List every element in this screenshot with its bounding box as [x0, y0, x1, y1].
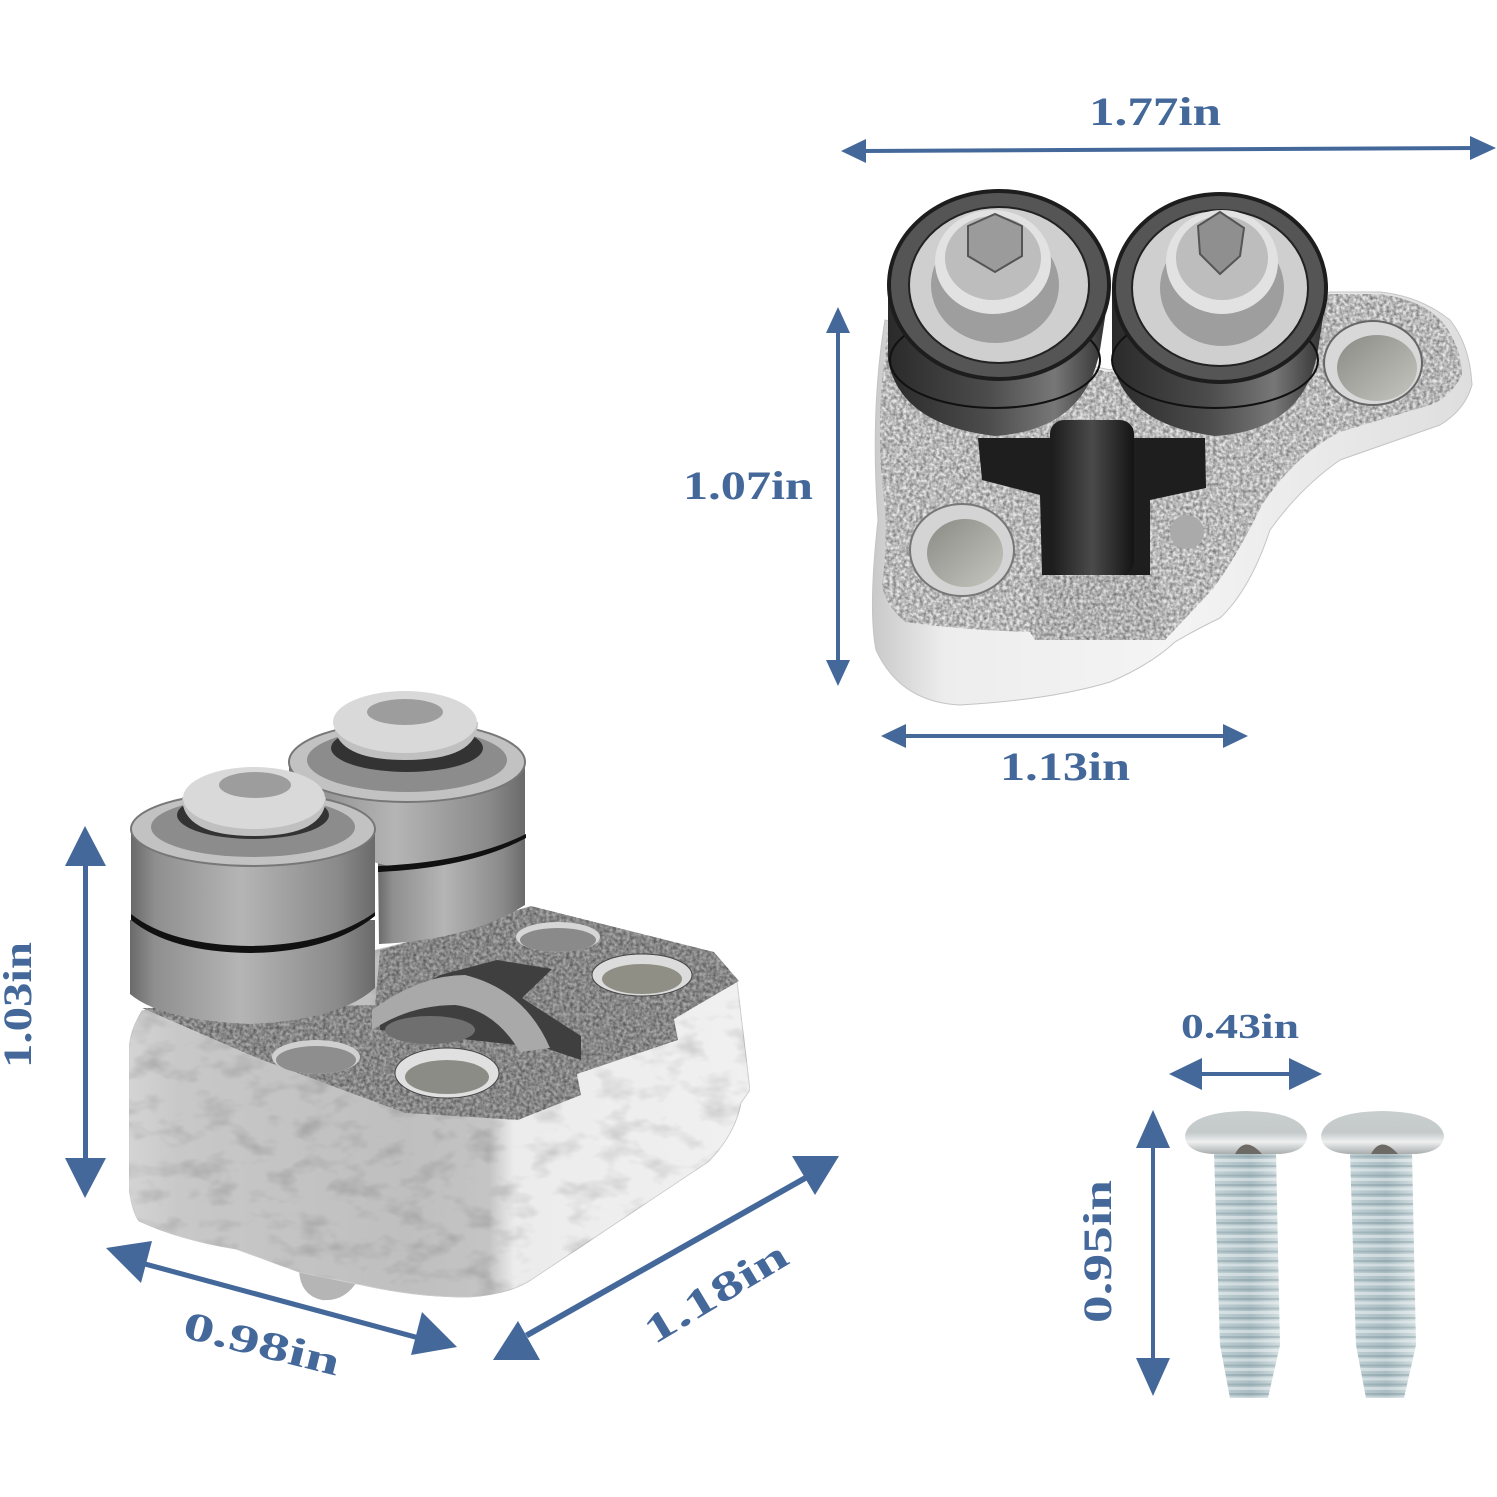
base top surface — [142, 906, 739, 1120]
back roller — [289, 691, 526, 944]
small locating dimple — [1170, 515, 1204, 549]
arrow: 1.77in — [841, 136, 1496, 163]
arrow: 1.13in — [881, 724, 1248, 748]
arrow: 1.03in — [65, 826, 106, 1198]
wheel pit — [380, 960, 581, 1060]
product: top view bracket — [872, 189, 1472, 705]
centre wheel — [1050, 420, 1134, 575]
label: 0.95in: 0.95in — [1075, 1180, 1120, 1323]
product: right screw — [1321, 1111, 1444, 1398]
label: 0.98in: 0.98in — [179, 1302, 345, 1384]
centre wheel slot — [978, 438, 1206, 575]
left roller — [887, 189, 1111, 436]
front roller — [130, 767, 375, 1024]
label: 1.13in: 1.13in — [1000, 744, 1130, 789]
product: isometric bracket — [129, 691, 750, 1300]
arrow: 1.07in — [826, 307, 850, 686]
bracket side wall — [872, 292, 1472, 705]
label: 0.43in: 0.43in — [1181, 1007, 1299, 1046]
label: 1.18in: 1.18in — [635, 1232, 796, 1353]
top surface holes — [272, 922, 692, 1098]
label: 1.07in: 1.07in — [683, 463, 813, 508]
product: left screw — [1185, 1111, 1307, 1398]
arrow: 0.43in — [1169, 1058, 1322, 1090]
arrow: 0.95in — [1136, 1110, 1170, 1396]
right mounting hole — [1324, 321, 1422, 405]
front tab — [1035, 576, 1166, 640]
left mounting hole — [910, 504, 1014, 596]
right roller — [1112, 192, 1328, 436]
bracket top face — [880, 294, 1462, 640]
arrow: 0.98in — [106, 1241, 457, 1355]
side wheel — [372, 975, 550, 1052]
label: 1.77in: 1.77in — [1089, 89, 1221, 134]
base body — [129, 910, 750, 1297]
bolt stub — [299, 1265, 358, 1300]
arrow: 1.18in — [493, 1156, 839, 1360]
